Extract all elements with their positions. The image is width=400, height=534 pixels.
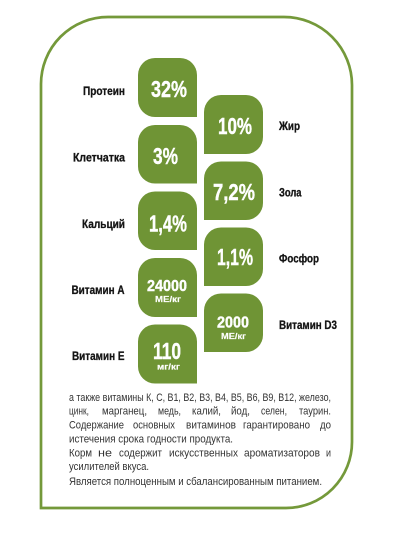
description text: ароматизаторов xyxy=(244,448,320,460)
description text: марганец, xyxy=(102,406,147,418)
description text: не xyxy=(98,448,112,460)
bubble: fat 10% xyxy=(204,95,263,154)
bubble: vitamin A 24000: 24000 xyxy=(147,278,187,295)
description text: усилителей вкуса. xyxy=(69,461,149,473)
label: Витамин Е: Витамин Е xyxy=(72,351,125,363)
label: Кальций: Кальций xyxy=(82,219,125,231)
description text: содержит xyxy=(119,448,162,460)
description text: калий, xyxy=(192,406,221,418)
description text: йод, xyxy=(231,406,250,418)
bubble: calcium 1,4% xyxy=(138,192,197,250)
bubble: vitamin D3 2000: 2000 xyxy=(217,314,249,332)
bubble: fiber 3%: 3% xyxy=(153,143,178,169)
label: Зола: Зола xyxy=(279,188,302,200)
label: Протеин: Протеин xyxy=(83,86,125,98)
bubble: fiber 3% xyxy=(138,125,197,184)
description text: и xyxy=(326,448,331,460)
description text: истечения срока годности продукта. xyxy=(69,434,233,446)
bubble: vitamin E 110: мг/кг xyxy=(157,362,181,372)
description text: цинк, xyxy=(69,406,89,418)
label: Витамин А: Витамин А xyxy=(72,285,124,297)
label: Жир: Жир xyxy=(278,121,300,133)
description text: а также витамины К, С, В1, В2, В3, В4, В5, В6, В9, В12, железо, xyxy=(69,392,331,404)
bubble: protein 32%: 32% xyxy=(151,76,187,102)
frame xyxy=(41,17,352,508)
label: Клетчатка: Клетчатка xyxy=(73,152,126,164)
bubble: phosphorus 1,1%: 1,1% xyxy=(217,244,253,270)
bubble: ash 7,2%: 7,2% xyxy=(213,179,255,205)
description text: до xyxy=(320,420,331,432)
description text: селен, xyxy=(261,406,287,418)
description text: Корм xyxy=(69,448,92,460)
description text: Содержание xyxy=(69,420,124,432)
description text: витаминов xyxy=(186,420,236,432)
bubble: vitamin A 24000 xyxy=(138,258,197,317)
label: Витамин D3: Витамин D3 xyxy=(279,320,337,332)
description text: гарантировано xyxy=(243,420,310,432)
bubble: vitamin E 110: 110 xyxy=(153,338,181,364)
bubble: vitamin E 110 xyxy=(138,324,197,384)
bubble: vitamin A 24000: МЕ/кг xyxy=(155,294,182,304)
bubble: ash 7,2% xyxy=(204,162,263,220)
description text: таурин. xyxy=(299,406,331,418)
description text: искусственных xyxy=(169,448,239,460)
bubble: phosphorus 1,1% xyxy=(204,228,263,286)
bubble: vitamin D3 2000: МЕ/кг xyxy=(221,331,247,341)
bubble: fat 10%: 10% xyxy=(218,113,252,139)
label: Фосфор: Фосфор xyxy=(279,254,319,266)
bubble: calcium 1,4%: 1,4% xyxy=(149,210,187,236)
description text: Является полноценным и сбалансированным питанием. xyxy=(69,476,322,488)
description text: основных xyxy=(133,420,176,432)
description text: медь, xyxy=(158,406,181,418)
bubble: vitamin D3 2000 xyxy=(204,294,263,352)
description text xyxy=(69,392,331,488)
bubble: protein 32% xyxy=(138,58,197,117)
